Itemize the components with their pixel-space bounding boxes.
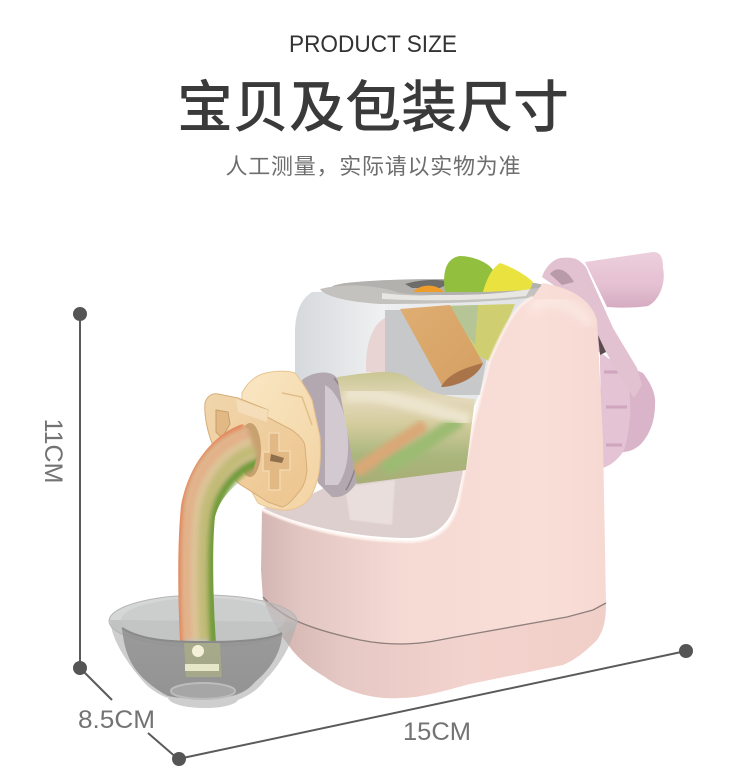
extruder die plate <box>205 394 307 507</box>
plate cross slot <box>263 433 290 490</box>
crank handle <box>585 252 664 308</box>
label: depth 8.5CM: 8.5CM <box>78 706 155 734</box>
rim front <box>320 285 549 304</box>
note text: 人工测量，实际请以实物为准 <box>226 154 520 179</box>
yellow food top <box>483 263 533 292</box>
body seam <box>263 597 606 644</box>
brown food through glass <box>400 305 483 387</box>
plate left slot <box>216 410 230 438</box>
label: width 15CM: 15CM <box>403 718 471 746</box>
plate hole <box>239 423 261 477</box>
crank arm <box>542 258 642 398</box>
dimension lines <box>80 314 686 759</box>
green food through glass <box>445 304 515 362</box>
bowl front <box>122 628 282 699</box>
extruder cap disc <box>240 371 320 510</box>
collar <box>302 373 365 497</box>
label: height 11CM: 11CM <box>39 419 67 483</box>
hopper and interior <box>295 256 549 405</box>
crank knob at back <box>600 352 655 468</box>
title: 宝贝及包装尺寸 <box>177 76 569 139</box>
noodle strand <box>177 424 260 645</box>
recess under extruder <box>263 440 470 538</box>
machine body <box>261 283 606 698</box>
bowl back <box>109 595 297 708</box>
rim back <box>332 279 548 295</box>
orange food top <box>413 286 444 292</box>
dimension dots <box>73 307 693 766</box>
green food top <box>444 256 493 292</box>
extruder cylinder <box>337 372 475 484</box>
plate tab <box>236 399 268 422</box>
recess light patch <box>345 480 395 525</box>
body lip highlight <box>262 297 533 542</box>
subtitle heading: PRODUCT SIZE: PRODUCT SIZE <box>289 31 457 58</box>
noodle machine illustration <box>109 252 664 708</box>
